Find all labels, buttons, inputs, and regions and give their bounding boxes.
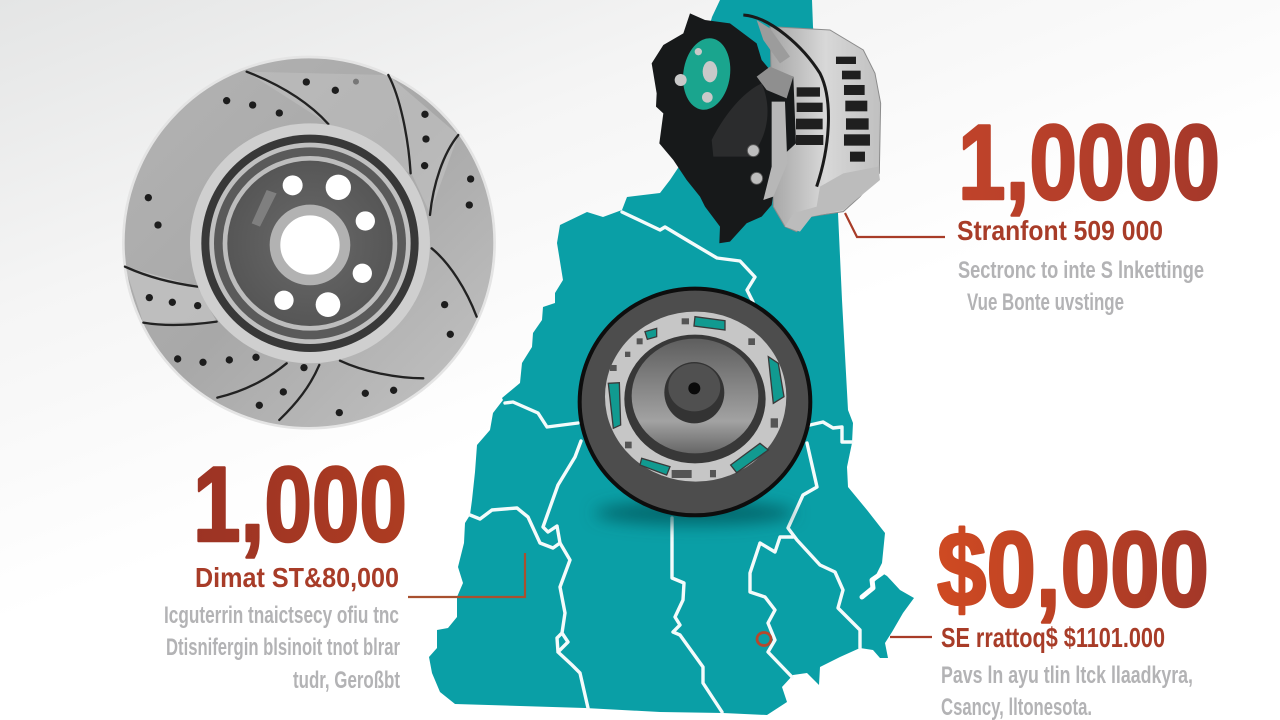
alternator cable [743, 15, 828, 187]
callout: top right stat [957, 102, 1220, 316]
wheel shadow [595, 501, 795, 525]
description: Sectronc to inte S lnkettinge [958, 257, 1204, 284]
callout: left stat: Dtisnifergin blsinoit tnot blrar [166, 634, 400, 661]
hub centre bore [275, 210, 345, 280]
disc hub [190, 123, 430, 363]
big number: 1,000 [193, 444, 407, 564]
icon: alternator [652, 13, 881, 243]
hub bolt holes [274, 175, 375, 317]
arrow: leader to alternator [845, 213, 945, 237]
callout: top right stat: Vue Bonte uvstinge [967, 289, 1124, 316]
sub heading: Dimat ST&80,000 [195, 562, 399, 593]
icon: central wheel [580, 289, 810, 515]
marker dot on map [757, 632, 771, 646]
big number: 1,0000 [958, 102, 1220, 222]
alternator black housing [652, 13, 796, 243]
callout: left stat [164, 444, 407, 694]
alternator silver frame [763, 102, 787, 200]
disc drilled holes [145, 78, 474, 416]
big number: $0,000 [937, 509, 1209, 629]
description: Pavs ln ayu tlin ltck llaadkyra, [941, 662, 1193, 689]
map: teal region [429, 0, 914, 715]
description: Icguterrin tnaictsecy ofiu tnc [164, 602, 399, 629]
arrow: leader bottom right [890, 636, 932, 638]
alternator lower casting [785, 167, 880, 232]
alternator rear fins [796, 57, 870, 162]
wheel ring small marks [610, 318, 778, 478]
arrow: leader left to map [408, 553, 525, 597]
sub heading: Stranfont 509 000 [957, 215, 1163, 246]
icon: brake disc [123, 57, 495, 428]
sub heading: SE rrattoq$ $1101.000 [941, 622, 1165, 653]
callout: bottom right stat [937, 509, 1209, 720]
wheel ring teal labels [608, 317, 784, 475]
map: white region borders [470, 212, 882, 712]
disc grooves [125, 72, 477, 420]
callout: left stat: tudr, Geroßbt [293, 667, 400, 694]
alternator teal circuit plate [679, 35, 735, 113]
alternator silver body [770, 27, 881, 232]
alternator bolts [747, 145, 759, 157]
